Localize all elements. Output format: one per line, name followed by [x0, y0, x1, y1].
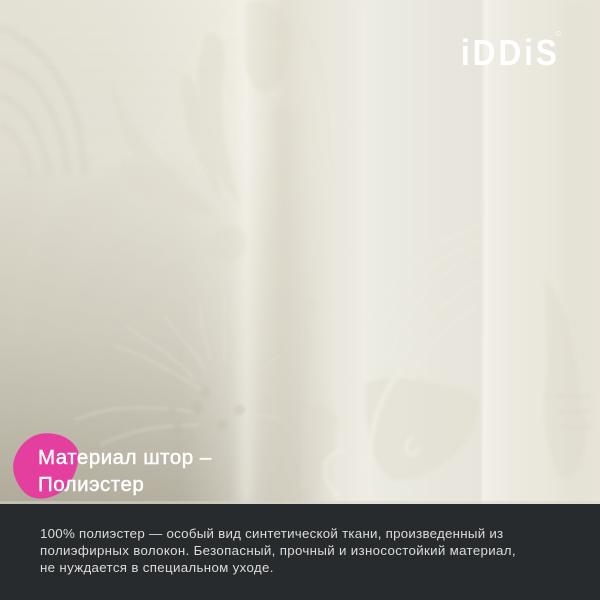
description text: 100% полиэстер — особый вид синтетической ткани, произведенный из [40, 526, 503, 541]
description text: полиэфирных волокон. Безопасный, прочный и износостойкий материал, [40, 543, 516, 558]
panel: description [0, 504, 600, 600]
description text: не нуждается в специальном уходе. [40, 560, 274, 575]
light strip above panel [0, 501, 600, 504]
soft folds [240, 0, 590, 504]
heading: material: Материал штор – [38, 446, 212, 469]
pink blob accent [13, 433, 78, 499]
lower-left shading [0, 182, 324, 504]
description text [40, 526, 516, 575]
bright crease [483, 0, 487, 504]
heading: material: Полиэстер [38, 473, 144, 496]
heading: material [38, 446, 212, 496]
registered mark [556, 32, 560, 36]
